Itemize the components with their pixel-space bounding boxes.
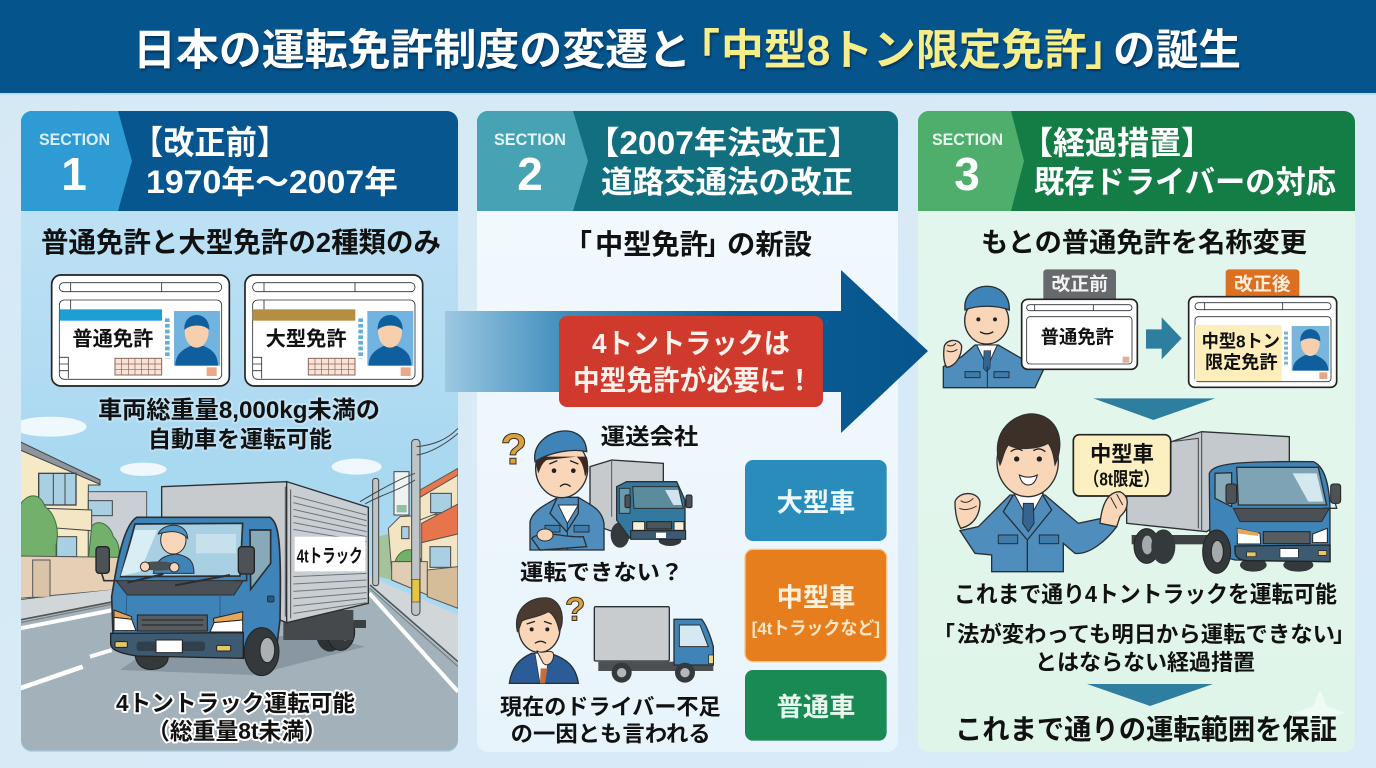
front right wheel xyxy=(244,628,279,676)
panel 2 background xyxy=(477,111,898,752)
sign: medium vehicle 8t limit: 中型車 xyxy=(1090,443,1154,467)
card: after revision xyxy=(1189,297,1337,387)
delivery truck side view xyxy=(594,607,713,683)
result text: 「 xyxy=(933,622,955,647)
caption: gross weight xyxy=(98,397,380,452)
tier: medium vehicle: [4tトラックなど] xyxy=(752,619,880,639)
worker with crossed arms xyxy=(530,431,604,550)
arrow: down small xyxy=(1087,684,1213,706)
sign: medium vehicle 8t limit: （8t限定） xyxy=(1084,469,1159,490)
panel: section 3 transitional measures xyxy=(918,111,1355,752)
result text: これまで通り4トントラックを運転可能 xyxy=(954,581,1337,607)
truck shadow xyxy=(120,633,365,675)
card: standard license xyxy=(52,275,229,386)
left house xyxy=(20,443,100,600)
badge: after: 改正後 xyxy=(1234,274,1291,295)
panel 3 header: 3 xyxy=(954,148,980,200)
raised hand over sign xyxy=(1100,492,1127,527)
sign: medium vehicle 8t limit xyxy=(1073,435,1171,496)
front left wheel xyxy=(135,655,168,669)
conclusion text: これまで通りの運転範囲を保証 xyxy=(955,714,1337,745)
truck label xyxy=(295,537,365,571)
right background houses xyxy=(379,534,392,580)
callout: 4t truck requires medium license xyxy=(559,316,823,407)
panel 2 header: 道路交通法の改正 xyxy=(601,165,853,200)
card: after revision: 中型8トン xyxy=(1202,331,1280,351)
title banner: 「 xyxy=(677,27,720,75)
sidewalks and road xyxy=(20,589,115,620)
badge: after xyxy=(1226,269,1299,299)
panel 3 heading: もとの普通免許を名称変更 xyxy=(981,228,1307,258)
illustrations and labels xyxy=(500,424,887,746)
panel 2 header: 【2007年法改正】 xyxy=(586,125,861,161)
big arrow spanning section 1 to 2 xyxy=(445,270,928,433)
card: large license: 大型免許 xyxy=(266,328,347,351)
truck facing forward xyxy=(1127,432,1341,573)
smiling man in work jacket xyxy=(955,414,1117,572)
utility poles and sign xyxy=(373,478,379,586)
panel 1 background xyxy=(21,111,458,752)
panel 3 header: SECTION xyxy=(932,130,1003,149)
title banner: 」 xyxy=(1085,27,1128,75)
cargo box xyxy=(162,482,287,623)
result text: 」 xyxy=(1333,622,1355,647)
title banner: の誕生 xyxy=(1113,27,1241,75)
tier: standard vehicle: 普通車 xyxy=(777,692,855,722)
thinking man in suit xyxy=(509,598,578,683)
cab xyxy=(112,517,280,658)
caption: 4t truck drivable: 4トントラック運転可能 xyxy=(116,690,355,716)
panel 2 header: 2 xyxy=(517,148,543,200)
caption: gross weight: 自動車を運転可能 xyxy=(148,426,332,452)
card: after revision: 限定免許 xyxy=(1205,351,1278,372)
label: cannot drive: 運転できない？ xyxy=(520,560,683,585)
title banner: 中型8トン限定免許 xyxy=(721,27,1087,75)
panel 2 heading xyxy=(564,229,812,260)
panel 2 heading: 「 xyxy=(564,229,592,260)
result text: 法が変わっても明日から運転できない xyxy=(957,622,1335,647)
caption: 4t truck drivable: （総重量8t未満） xyxy=(147,718,327,744)
panel 2 header xyxy=(477,111,898,211)
result text xyxy=(933,581,1355,675)
mirrors xyxy=(96,547,109,573)
panel 2 header: SECTION xyxy=(494,130,566,149)
sparkle xyxy=(1294,690,1346,735)
license cards xyxy=(52,275,423,386)
driver xyxy=(153,554,194,573)
panel 3 header xyxy=(918,111,1355,211)
illustrations xyxy=(943,269,1341,573)
card: before revision: 普通免許 xyxy=(1041,326,1114,347)
panel: section 1 before the revision xyxy=(13,111,458,753)
panel: section 2 law revision xyxy=(477,111,898,752)
tier: large vehicle: 大型車 xyxy=(777,488,855,518)
panel 3 header: 【経過措置】 xyxy=(1021,125,1213,161)
rear wheels xyxy=(317,640,336,652)
panel 1 header: 1 xyxy=(61,148,87,200)
panel 1 header: SECTION xyxy=(39,130,110,149)
tier: medium vehicle xyxy=(745,549,887,662)
cab front band xyxy=(116,581,243,595)
panel 2 heading: 」 xyxy=(704,229,732,260)
card: large license xyxy=(245,275,423,386)
arrow: before to after xyxy=(1146,317,1182,359)
bumper xyxy=(111,633,243,658)
tier: medium vehicle: 中型車 xyxy=(777,583,855,613)
caption: gross weight: 車両総重量8,000kg未満の xyxy=(98,397,380,424)
panel 2 heading: 中型免許 xyxy=(595,229,708,260)
callout: 4t truck requires medium license: 4トントラックは xyxy=(592,328,790,359)
title banner xyxy=(0,0,1376,95)
left trees xyxy=(20,496,57,558)
panel 1 header: 【改正前】 xyxy=(132,124,288,161)
question mark: ? xyxy=(501,426,527,474)
question mark small: ? xyxy=(565,592,585,629)
panel 3 header: 既存ドライバーの対応 xyxy=(1034,165,1336,200)
badge: before xyxy=(1043,269,1116,301)
text: driver shortage: の一因とも言われる xyxy=(511,721,711,746)
callout: 4t truck requires medium license: 中型免許が必要に！ xyxy=(573,364,813,396)
label: transport company: 運送会社 xyxy=(601,424,699,450)
text: driver shortage: 現在のドライバー不足 xyxy=(500,695,721,720)
caption: 4t truck drivable xyxy=(116,690,355,744)
headlights xyxy=(114,610,132,619)
result text: とはならない経過措置 xyxy=(1035,650,1255,675)
scene: street with 4t truck xyxy=(13,417,458,753)
truck behind worker xyxy=(590,460,692,548)
badge: before: 改正前 xyxy=(1051,274,1108,295)
panel 3 background xyxy=(918,111,1355,752)
panel 1 header: 1970年～2007年 xyxy=(146,164,398,200)
panel 1 heading: 普通免許と大型免許の2種類のみ xyxy=(41,227,441,258)
title banner: 日本の運転免許制度の変遷と xyxy=(133,27,691,75)
arrow: down xyxy=(1093,398,1215,420)
card: standard license: 普通免許 xyxy=(72,328,153,351)
text: driver shortage xyxy=(500,695,721,746)
clouds xyxy=(13,417,87,437)
panel 2 heading: の新設 xyxy=(727,229,812,260)
tier: large vehicle xyxy=(745,460,887,541)
card: before revision xyxy=(1022,299,1137,369)
tier: standard vehicle xyxy=(745,670,887,741)
worker holding license xyxy=(943,286,1043,388)
panel 1 header xyxy=(21,111,458,211)
truck label: 4tトラック xyxy=(297,546,363,567)
